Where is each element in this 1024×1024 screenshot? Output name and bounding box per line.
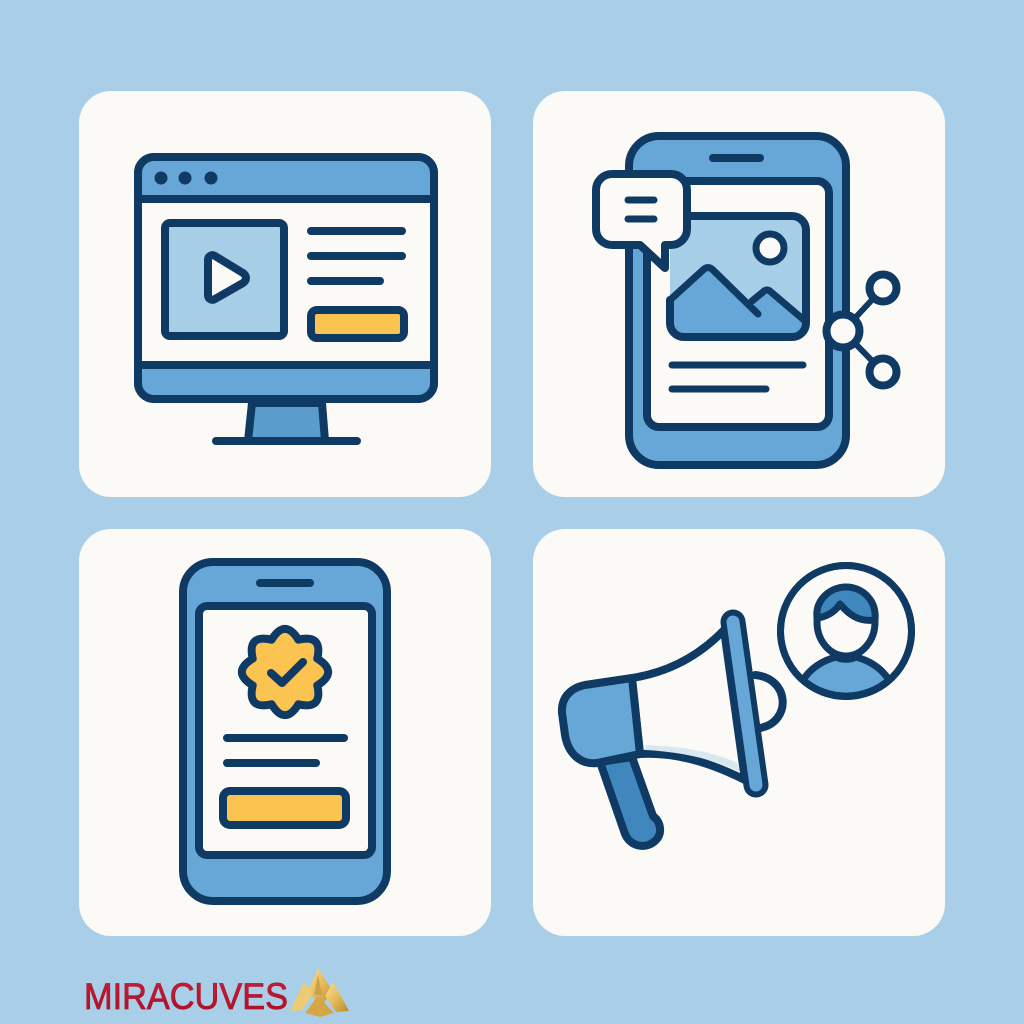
call-to-action button [311,310,404,338]
panel: social media post [533,91,945,497]
speech bubble [596,174,687,268]
logo: Miracuves [84,968,349,1017]
verified badge [242,629,328,715]
video player with play button [165,223,284,336]
image card [670,216,806,337]
caption lines [672,365,803,389]
icon: person in circle [780,566,912,696]
panel: influencer megaphone [533,529,945,936]
text lines [311,231,402,281]
panel: mobile verified offer [79,529,491,936]
logo mountain mark [290,968,349,1017]
panel: website video ad [79,91,491,497]
text lines [227,738,344,763]
browser dots [154,172,218,184]
icon: smartphone with badge [183,562,387,901]
call-to-action button [223,791,346,825]
share icon [826,274,896,386]
icon: megaphone [562,622,783,846]
icon: desktop monitor [138,157,434,441]
logo wordmark: MIRACUVES [84,976,288,1017]
icon: smartphone with post [596,136,896,465]
